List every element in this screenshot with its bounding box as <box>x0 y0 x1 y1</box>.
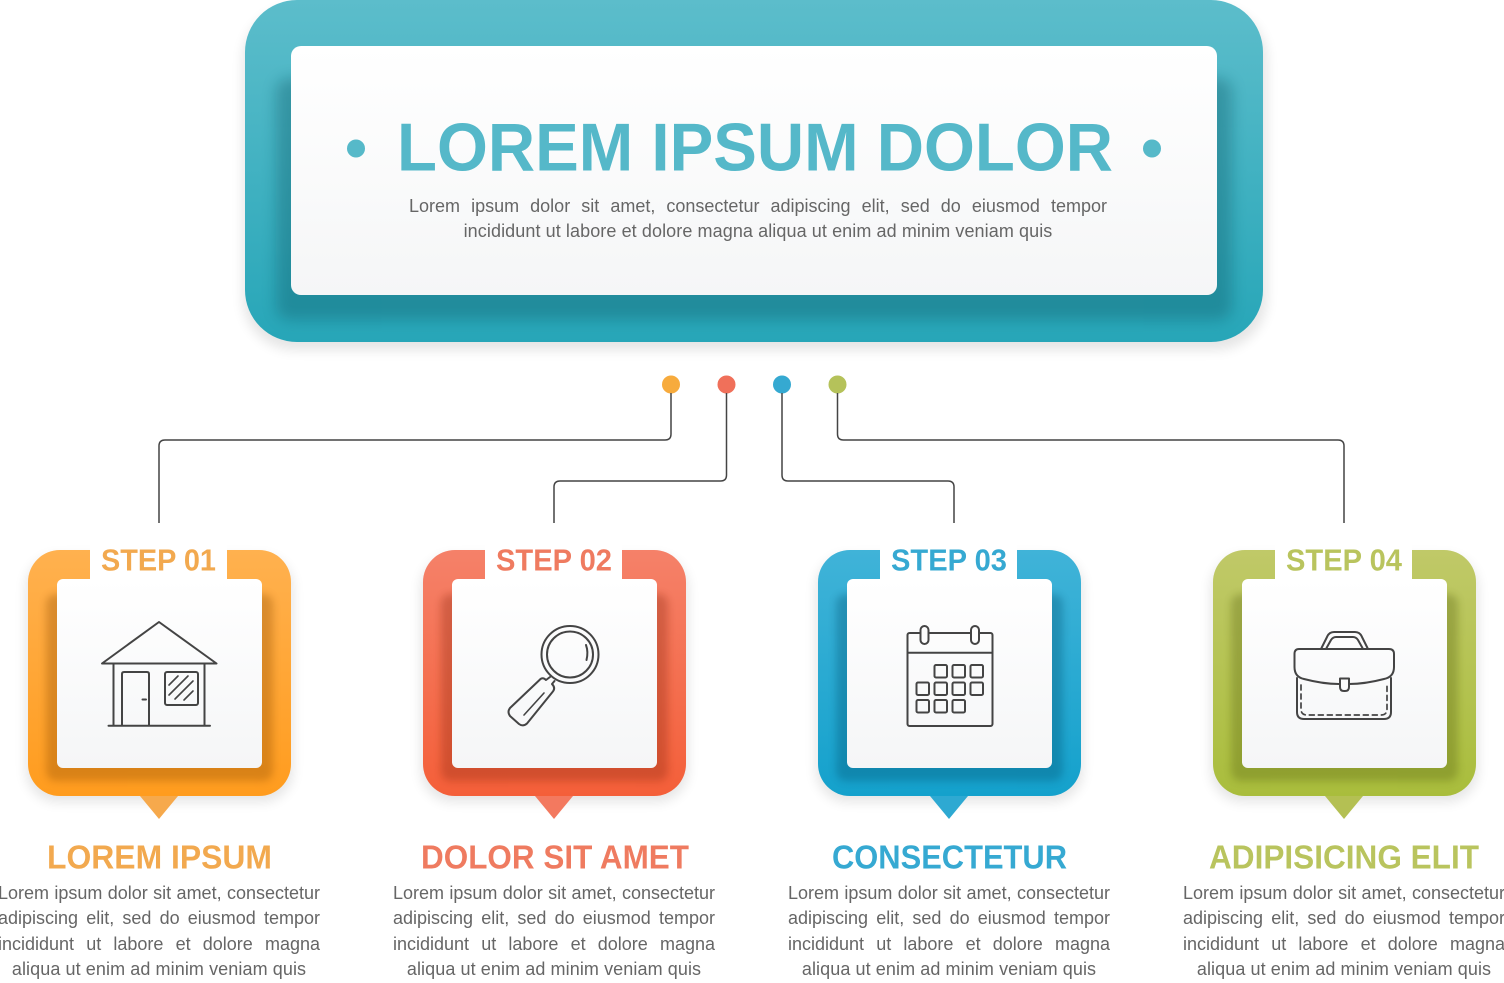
text block: step 04 description <box>1183 883 1504 979</box>
text block: header description: Lorem ipsum dolor sit amet, consectetur adipiscing elit, sed do eiusmod tempor <box>409 196 1107 216</box>
connector: step 04 <box>838 393 1344 523</box>
panel: main header <box>243 0 1267 350</box>
title: LOREM IPSUM DOLOR <box>397 110 1113 186</box>
connector: step 02 <box>554 393 726 523</box>
connector dot: orange <box>662 376 680 394</box>
text block: step 02 description: Lorem ipsum dolor sit amet, consectetur <box>393 883 715 903</box>
text block: step 03 description: adipiscing elit, sed do eiusmod tempor <box>788 908 1110 928</box>
heading: DOLOR SIT AMET <box>421 838 689 876</box>
pointer <box>930 796 968 819</box>
step label: STEP 01 <box>101 542 216 578</box>
text block: step 03 description <box>788 883 1110 979</box>
icon: briefcase <box>1294 632 1394 719</box>
step label: STEP 03 <box>891 542 1007 578</box>
pointer <box>535 796 573 819</box>
text block: step 04 description: incididunt ut labore et dolore magna <box>1183 934 1504 954</box>
panel: step 04 card <box>1209 540 1479 876</box>
connector dot: blue <box>773 376 791 394</box>
text block: step 01 description: Lorem ipsum dolor sit amet, consectetur <box>0 883 320 903</box>
panel: step 01 card <box>26 540 293 876</box>
connector dot: red <box>718 376 736 394</box>
text block: step 04 description: Lorem ipsum dolor sit amet, consectetur <box>1183 883 1504 903</box>
text block: step 01 description: incididunt ut labore et dolore magna <box>0 934 320 954</box>
text block: step 03 description: aliqua ut enim ad minim veniam quis <box>802 959 1096 979</box>
panel: step 02 card <box>421 540 689 876</box>
panel: step 03 card <box>816 540 1083 876</box>
text block: step 04 description: adipiscing elit, sed do eiusmod tempor <box>1183 908 1504 928</box>
text block: step 02 description: incididunt ut labore et dolore magna <box>393 934 715 954</box>
text block: step 03 description: incididunt ut labore et dolore magna <box>788 934 1110 954</box>
heading: LOREM IPSUM <box>47 838 272 876</box>
connector dot: green <box>828 376 846 394</box>
pointer <box>1325 796 1363 819</box>
text block: step 01 description <box>0 883 320 979</box>
text block: step 01 description: aliqua ut enim ad minim veniam quis <box>12 959 306 979</box>
connector: step 01 <box>159 393 671 523</box>
text block: header description: incididunt ut labore et dolore magna aliqua ut enim ad minim veniam quis <box>464 221 1052 241</box>
pointer <box>140 796 178 819</box>
text block: step 02 description: adipiscing elit, sed do eiusmod tempor <box>393 908 715 928</box>
step label: STEP 02 <box>496 542 612 578</box>
text block: step 02 description: aliqua ut enim ad minim veniam quis <box>407 959 701 979</box>
connector: step 03 <box>782 393 954 523</box>
step label: STEP 04 <box>1286 542 1403 578</box>
text block: step 03 description: Lorem ipsum dolor sit amet, consectetur <box>788 883 1110 903</box>
text block: header description <box>409 196 1107 241</box>
heading: CONSECTETUR <box>832 838 1067 876</box>
bullet: right <box>1143 140 1161 158</box>
text block: step 02 description <box>393 883 715 979</box>
text block: step 04 description: aliqua ut enim ad minim veniam quis <box>1197 959 1491 979</box>
icon: magnifying glass <box>508 626 598 725</box>
icon: house <box>102 622 216 726</box>
bullet: left <box>347 140 365 158</box>
heading: ADIPISICING ELIT <box>1209 838 1479 876</box>
text block: step 01 description: adipiscing elit, sed do eiusmod tempor <box>0 908 320 928</box>
icon: calendar <box>908 626 992 726</box>
